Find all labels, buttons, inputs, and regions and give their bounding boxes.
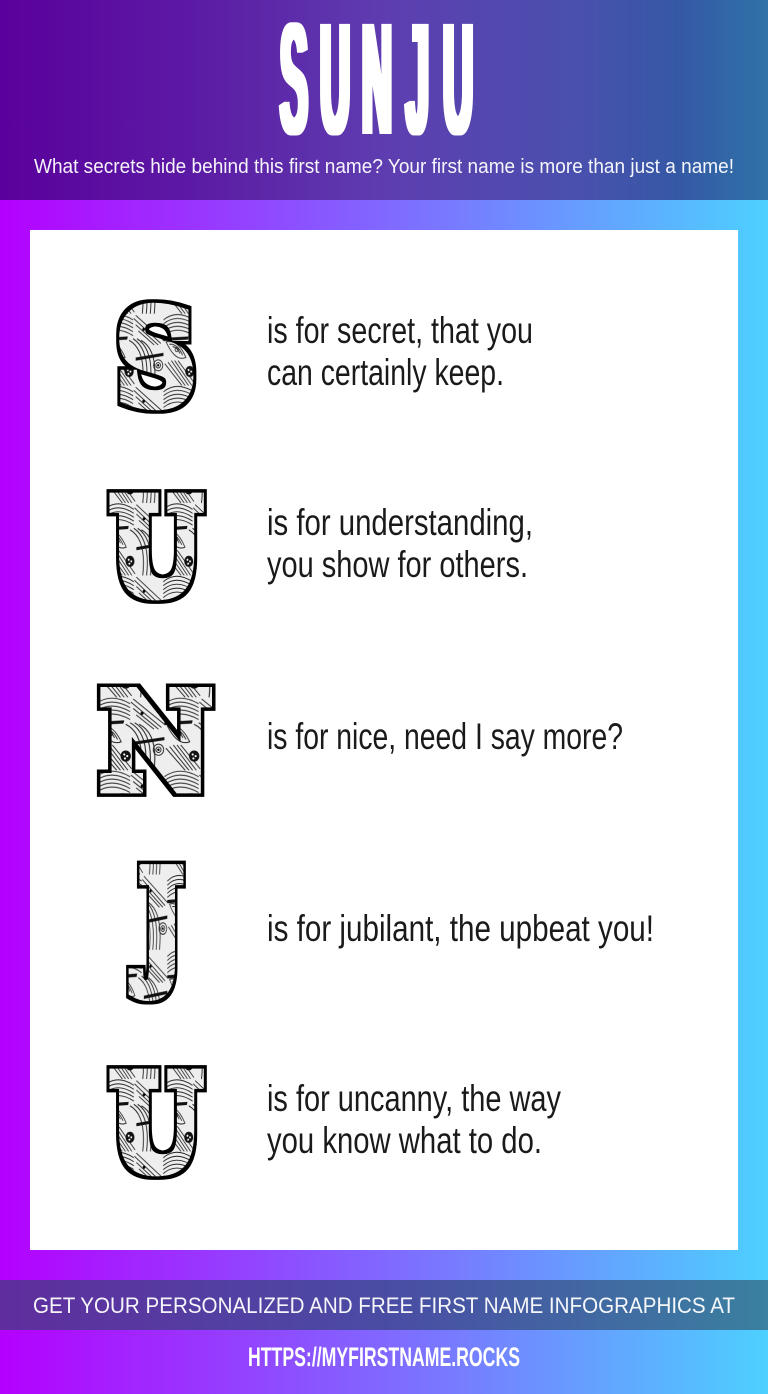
line: second U description: is for uncanny, the way — [267, 1078, 561, 1119]
footer call to action: GET YOUR PERSONALIZED AND FREE FIRST NAME INFOGRAPHICS AT — [33, 1293, 735, 1318]
line: U description: is for understanding, — [267, 502, 533, 543]
footer url: HTTPS://MYFIRSTNAME.ROCKS — [248, 1342, 520, 1372]
letter U second: U — [111, 1049, 201, 1199]
line: second U description: you know what to do. — [267, 1120, 542, 1161]
line: U description: you show for others. — [267, 544, 528, 585]
line: S description — [267, 310, 533, 393]
letter U: U — [111, 473, 201, 623]
letter N: N — [101, 668, 211, 818]
letter S: S — [118, 283, 194, 432]
white content panel — [30, 230, 738, 1250]
line: J description: is for jubilant, the upbeat you! — [267, 908, 654, 949]
footer band — [0, 1280, 768, 1330]
line: U description — [267, 502, 533, 585]
letter J: J — [133, 843, 182, 999]
line: S description: can certainly keep. — [267, 352, 504, 393]
line: N description: is for nice, need I say more? — [267, 716, 623, 757]
line: second U description — [267, 1078, 561, 1161]
line: S description: is for secret, that you — [267, 310, 533, 351]
header band — [0, 0, 768, 200]
subtitle: What secrets hide behind this first name? Your first name is more than just a name! — [34, 156, 734, 178]
